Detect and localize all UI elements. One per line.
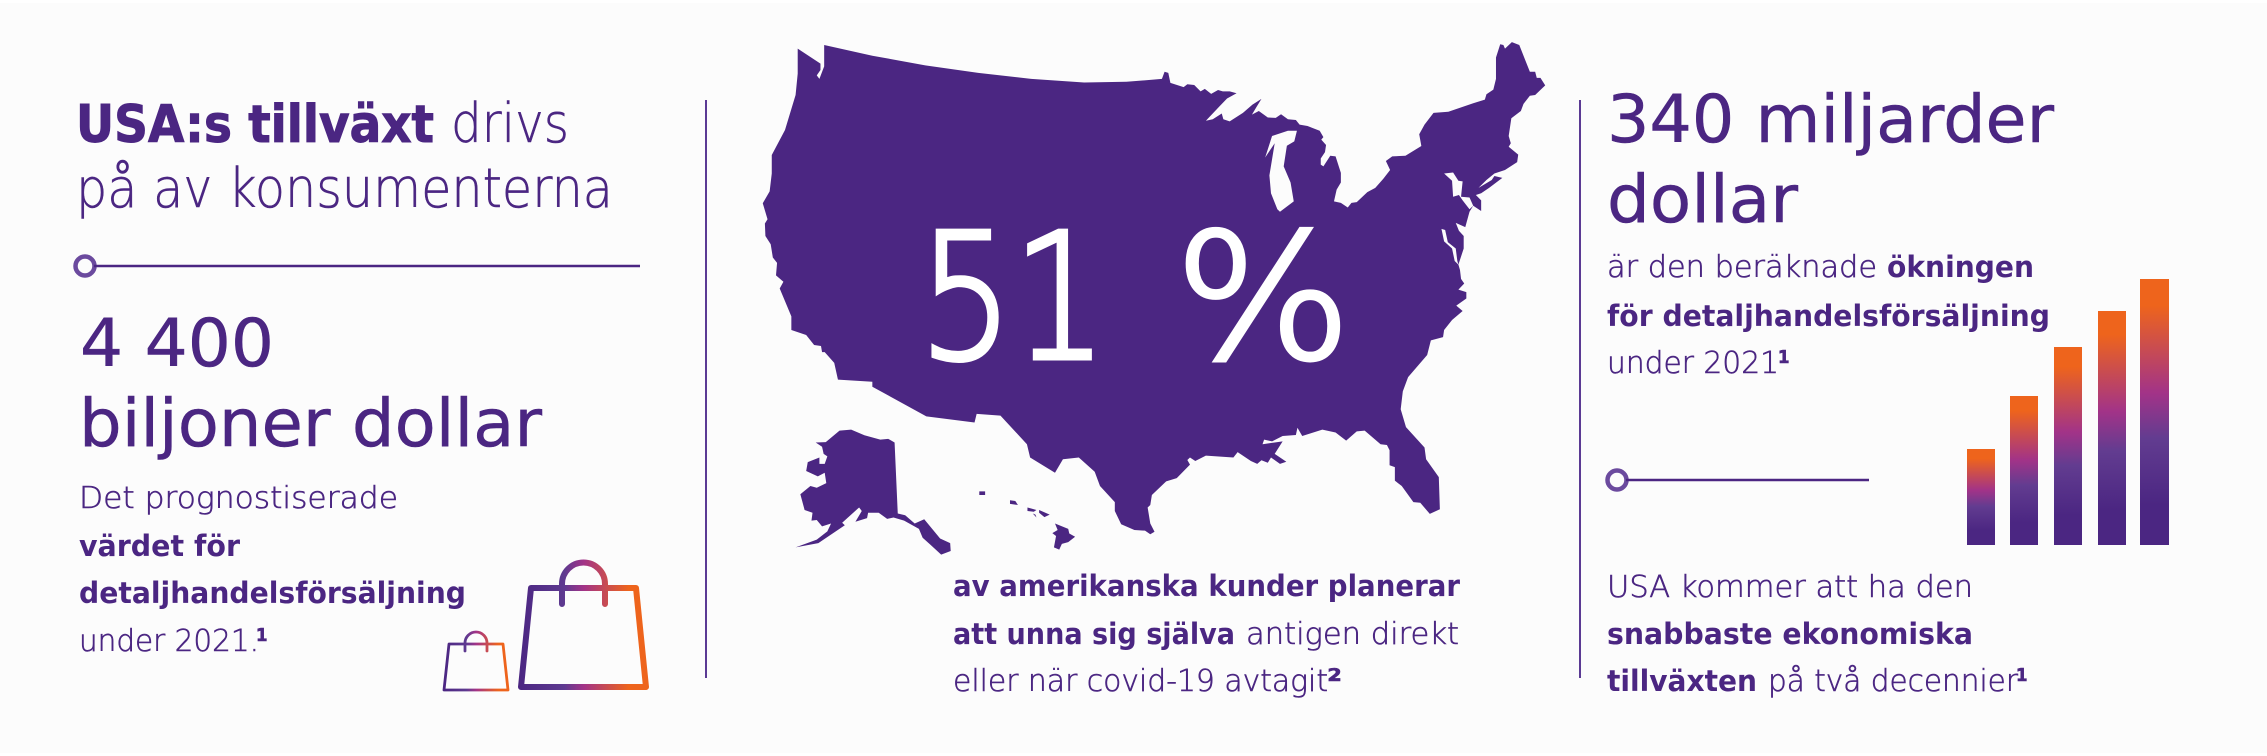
map: United States	[763, 42, 1545, 555]
text block: fastest economic growth: på två decennier	[1768, 663, 2019, 699]
icon: large shopping bag	[521, 562, 646, 687]
text block: American customers treat themselves: eller när covid-19 avtagit	[953, 664, 1328, 699]
text block: retail value forecast: Det prognostiserade	[79, 481, 398, 516]
panel: left column	[76, 92, 646, 690]
panel: right column	[1607, 81, 2169, 699]
text block: fastest economic growth: USA kommer att ha den	[1607, 570, 1973, 605]
text block: retail value forecast: ¹	[256, 623, 268, 659]
text block: American customers treat themselves: antigen direkt	[1246, 617, 1459, 652]
text block: fastest economic growth: snabbaste ekonomiska	[1607, 617, 1973, 651]
stat: 4 400 biljoner dollar	[79, 305, 543, 462]
text block: estimated increase in retail sales: för detaljhandelsförsäljning	[1607, 299, 2050, 333]
text block: fastest economic growth: tillväxten	[1607, 664, 1757, 698]
stat: 340 miljarder dollar	[1607, 81, 2055, 238]
divider: left vertical	[705, 100, 707, 678]
heading: USA:s tillväxt drivs på av konsumenterna: USA:s tillväxt	[76, 95, 434, 155]
panel: centre column	[763, 42, 1545, 699]
text block: fastest economic growth: ¹	[2016, 663, 2028, 699]
stat: 340 miljarder dollar: 340 miljarder	[1607, 81, 2055, 158]
stat: 51 %: 51	[919, 197, 1107, 400]
divider with ring	[76, 256, 640, 276]
text block: estimated increase in retail sales	[1607, 250, 2050, 381]
text block: American customers treat themselves: ²	[1327, 663, 1342, 699]
text block: estimated increase in retail sales: ¹	[1778, 345, 1790, 381]
text block: estimated increase in retail sales: ökningen	[1887, 250, 2034, 284]
stat: 340 miljarder dollar: dollar	[1607, 161, 1799, 238]
heading: USA:s tillväxt drivs på av konsumenterna	[76, 92, 613, 220]
text block: retail value forecast: under 2021.	[79, 624, 259, 659]
heading: USA:s tillväxt drivs på av konsumenterna: drivs	[451, 92, 569, 155]
bar chart: growth	[1967, 279, 2169, 545]
text block: American customers treat themselves: att unna sig själva	[953, 617, 1235, 651]
stat: 4 400 biljoner dollar: 4 400	[80, 305, 274, 382]
divider: right vertical	[1579, 100, 1581, 678]
icon: small shopping bag	[444, 632, 508, 690]
heading: USA:s tillväxt drivs på av konsumenterna: på av konsumenterna	[76, 157, 613, 220]
text block: retail value forecast	[79, 481, 466, 659]
stat: 51 %: %	[1174, 197, 1352, 400]
text block: retail value forecast: detaljhandelsförsäljning	[79, 576, 466, 610]
text block: American customers treat themselves: av amerikanska kunder planerar	[953, 569, 1461, 603]
text block: fastest economic growth	[1607, 570, 2028, 699]
text block: estimated increase in retail sales: under 2021	[1607, 346, 1779, 381]
text block: estimated increase in retail sales: är den beräknade	[1607, 250, 1877, 285]
text block: American customers treat themselves	[953, 569, 1461, 699]
divider with ring	[1608, 470, 1869, 490]
stat: 4 400 biljoner dollar: biljoner dollar	[79, 385, 543, 462]
text block: retail value forecast: värdet för	[79, 529, 241, 563]
stat: 51 %	[919, 197, 1352, 400]
